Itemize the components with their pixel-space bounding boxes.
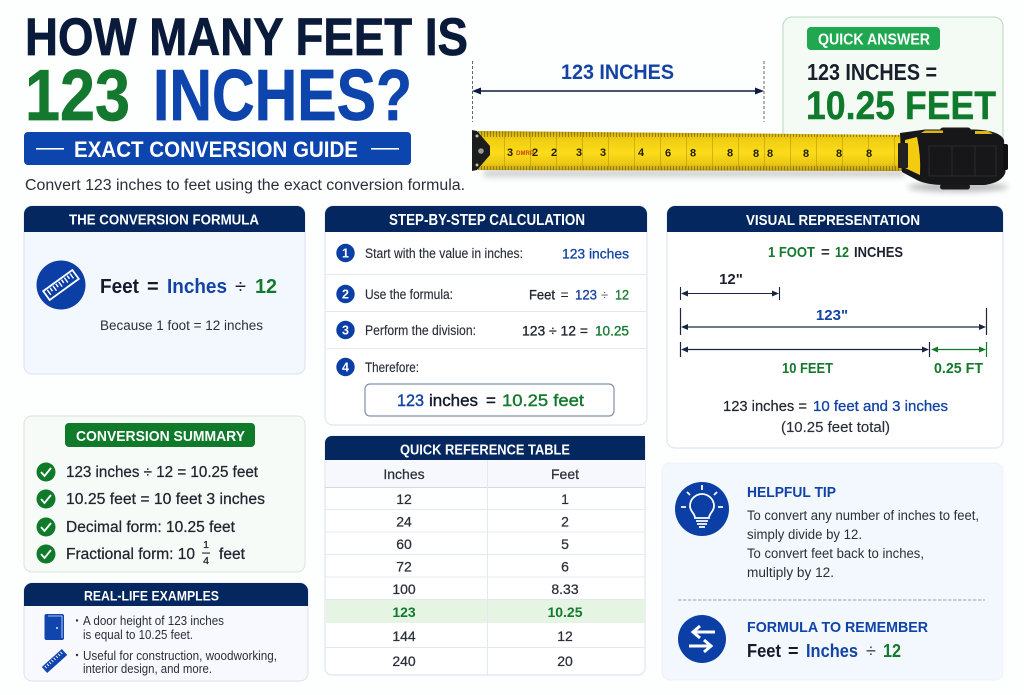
- heading: visual representation: [667, 206, 1003, 232]
- visual result text: (10.25 feet total): [781, 420, 890, 436]
- summary checks: [36, 462, 56, 564]
- result box: 123: [397, 391, 424, 410]
- tape measure: 3: [600, 147, 606, 159]
- heading: real-life examples: [24, 583, 308, 606]
- step 4: 4: [342, 360, 349, 374]
- heading: step-by-step: STEP-BY-STEP CALCULATION: [389, 212, 585, 229]
- tape measure: 8: [866, 148, 872, 160]
- result box: 10.25 feet: [502, 391, 584, 410]
- table rows: 24: [396, 514, 412, 530]
- quick answer card: QUICK ANSWER: [818, 32, 930, 48]
- table rows: Inches: [383, 466, 425, 482]
- step 4: Therefore:: [365, 360, 419, 375]
- tape measure: DMRP: [516, 151, 534, 157]
- caption: 1 foot = 12 inches: 1 FOOT: [768, 244, 815, 261]
- panel: conversion summary: [24, 416, 305, 572]
- tip text: multiply by 12.: [747, 565, 834, 580]
- table rows: Feet: [551, 466, 579, 482]
- title: [25, 8, 468, 136]
- dimension: 123 inches: 123": [816, 307, 848, 324]
- subtitle banner: [24, 132, 411, 165]
- heading: real-life examples: REAL-LIFE EXAMPLES: [84, 588, 219, 604]
- result box: [365, 384, 614, 416]
- tape measure: 6: [665, 148, 671, 160]
- tip heading: HELPFUL TIP: [747, 484, 836, 501]
- table rows: 20: [557, 653, 573, 669]
- quick answer card: 10.25 FEET: [806, 84, 996, 128]
- panel: step-by-step calculation: [325, 206, 647, 425]
- formula heading: FORMULA TO REMEMBER: [747, 619, 928, 636]
- title: HOW MANY FEET IS: [25, 8, 468, 67]
- title: 123: [25, 56, 130, 136]
- icon: door: [44, 614, 64, 640]
- examples text: [76, 614, 277, 676]
- summary lines: 4: [203, 555, 209, 567]
- tape measure: 2: [532, 147, 538, 159]
- panel: quick reference table: [325, 436, 645, 675]
- tape measure: 8: [803, 148, 809, 160]
- heading: quick reference table: QUICK REFERENCE TABLE: [400, 442, 570, 458]
- formula to remember: Feet: [747, 641, 781, 661]
- formula: Feet: [100, 276, 139, 298]
- formula to remember: =: [788, 641, 799, 661]
- step 2: ÷: [601, 288, 608, 302]
- subtitle banner: EXACT CONVERSION GUIDE: [74, 137, 358, 162]
- dimension: 0.25 feet: 0.25 FT: [934, 360, 983, 377]
- table rows: 144: [392, 628, 416, 644]
- table rows: 123: [392, 604, 416, 620]
- tip text: To convert any number of inches to feet,: [747, 508, 979, 523]
- examples text: Useful for construction, woodworking,: [83, 649, 277, 663]
- table rows: 12: [396, 491, 412, 507]
- formula: =: [147, 276, 159, 298]
- step 1: 1: [342, 246, 349, 260]
- table rows: 5: [561, 536, 569, 552]
- heading: conversion summary: CONVERSION SUMMARY: [76, 428, 245, 445]
- caption: 1 foot = 12 inches: [768, 244, 903, 261]
- step 2: 123: [575, 286, 597, 302]
- tape measure: 3: [507, 147, 513, 159]
- formula: [100, 276, 277, 298]
- icon: ruler: [36, 260, 86, 310]
- caption: 1 foot = 12 inches: 12: [835, 244, 849, 261]
- summary lines: [66, 464, 265, 567]
- panel: helpful tip: [662, 463, 1003, 680]
- tape measure: 8: [690, 148, 696, 160]
- step 2: 2: [342, 288, 349, 302]
- formula to remember: Inches: [806, 641, 858, 661]
- heading: conversion summary: [65, 423, 255, 447]
- dimension: 10 feet: [680, 342, 930, 377]
- heading: visual representation: VISUAL REPRESENTATION: [746, 212, 920, 229]
- dimension: 123 inches: [680, 307, 986, 335]
- step 3: Perform the division:: [365, 323, 476, 338]
- formula: 12: [255, 276, 277, 298]
- table rows: [383, 466, 583, 669]
- summary lines: 1: [203, 539, 209, 551]
- result box: inches: [429, 391, 478, 410]
- table rows: 60: [396, 536, 412, 552]
- summary lines: Decimal form: 10.25 feet: [66, 519, 236, 536]
- formula to remember: 12: [883, 641, 901, 661]
- table rows: 1: [561, 491, 569, 507]
- step 3: 3: [342, 324, 349, 338]
- panel: visual representation: [667, 206, 1003, 448]
- summary lines: 10.25 feet = 10 feet 3 inches: [66, 491, 265, 508]
- dimension: 12 inches: 12": [719, 271, 743, 288]
- examples text: A door height of 123 inches: [83, 614, 224, 628]
- visual result text: [723, 399, 948, 436]
- title: INCHES?: [153, 56, 412, 136]
- tape measure: 8: [836, 148, 842, 160]
- step 3: [336, 321, 629, 339]
- step 2: Use the formula:: [365, 287, 453, 302]
- tip text: To convert feet back to inches,: [747, 546, 924, 561]
- tape measure: 4: [638, 147, 645, 159]
- examples text: interior design, and more.: [83, 662, 212, 676]
- table rows: 2: [561, 514, 569, 530]
- summary lines: feet: [219, 546, 246, 563]
- tape measure: 2: [551, 147, 557, 159]
- dimension arrow: 123 inches: [472, 61, 764, 122]
- step 3: 10.25: [595, 322, 629, 338]
- heading: step-by-step: [325, 206, 647, 232]
- formula note: Because 1 foot = 12 inches: [100, 318, 263, 333]
- heading: conversion formula: [24, 206, 305, 232]
- dimension arrow: 123 inches: 123 INCHES: [561, 61, 674, 84]
- dimension: 10 feet: 10 FEET: [782, 360, 833, 377]
- step 1: 123 inches: [562, 246, 629, 262]
- table rows: 10.25: [547, 604, 583, 620]
- table rows: 6: [561, 558, 569, 574]
- intro text: Convert 123 inches to feet using the exact conversion formula.: [25, 177, 465, 194]
- tape measure: 8: [767, 148, 773, 160]
- quick answer card: [783, 17, 1003, 150]
- table rows: 72: [396, 558, 412, 574]
- caption: 1 foot = 12 inches: INCHES: [854, 244, 903, 261]
- visual result text: 123 inches =: [723, 399, 807, 415]
- icon: small ruler: [42, 649, 67, 673]
- tape measure: [472, 128, 1008, 192]
- tape measure: 3: [576, 147, 582, 159]
- tip text: simply divide by 12.: [747, 527, 862, 542]
- caption: 1 foot = 12 inches: =: [821, 244, 830, 261]
- table rows: 240: [392, 653, 416, 669]
- table rows: 100: [392, 581, 416, 597]
- step 2: =: [560, 286, 569, 302]
- formula to remember: [747, 641, 901, 661]
- step 2: [336, 285, 629, 303]
- visual result text: 10 feet and 3 inches: [813, 399, 948, 415]
- formula to remember: ÷: [866, 641, 876, 661]
- tape measure: 8: [727, 148, 733, 160]
- formula: ÷: [235, 276, 246, 298]
- panel: conversion formula: [24, 206, 305, 374]
- dimension: 0.25 feet: [931, 342, 986, 377]
- summary lines: 123 inches ÷ 12 = 10.25 feet: [66, 464, 259, 481]
- tip text: [747, 508, 979, 580]
- icon: light bulb: [675, 482, 729, 536]
- dimension: 12 inches: [680, 271, 780, 300]
- examples text: is equal to 10.25 feet.: [83, 628, 193, 642]
- heading: conversion formula: THE CONVERSION FORMULA: [69, 212, 259, 228]
- icon: swap arrows: [678, 615, 726, 663]
- tape measure: 8: [753, 148, 759, 160]
- result box: =: [486, 391, 496, 410]
- step 3: 123 ÷ 12 =: [522, 322, 588, 338]
- summary lines: Fractional form: 10: [66, 546, 195, 563]
- step 4: [336, 358, 419, 376]
- step 2: Feet: [529, 286, 555, 302]
- heading: quick reference table: [325, 436, 645, 460]
- table rows: 8.33: [551, 581, 579, 597]
- step 2: 12: [615, 286, 629, 302]
- step 1: [336, 244, 629, 262]
- panel: real-life examples: [24, 583, 308, 681]
- table rows: 12: [557, 628, 573, 644]
- step 1: Start with the value in inches:: [365, 246, 523, 261]
- quick answer card: 123 INCHES =: [807, 59, 937, 85]
- formula: Inches: [167, 276, 227, 298]
